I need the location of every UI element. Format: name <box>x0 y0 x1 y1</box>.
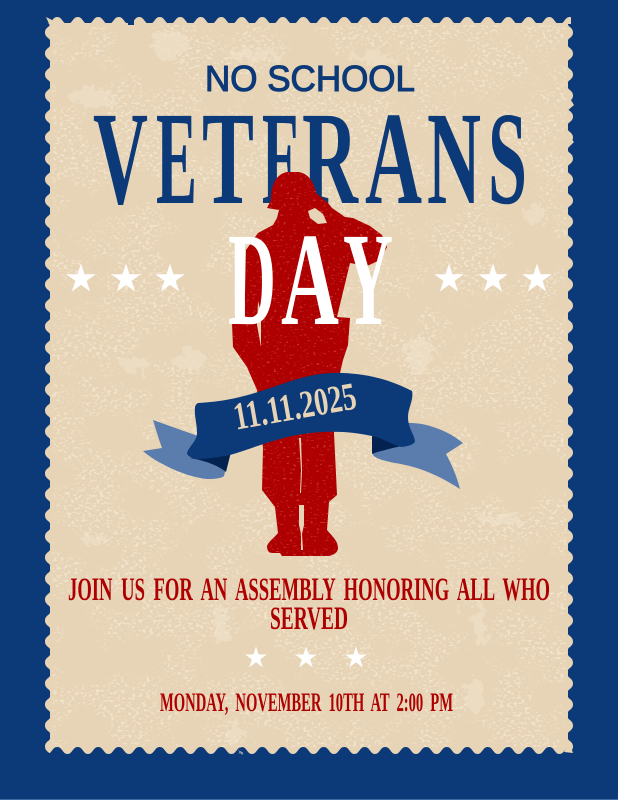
heading: veterans <box>93 84 527 232</box>
heading: day: A <box>281 205 339 353</box>
bottom edge line <box>0 799 618 800</box>
heading: veterans: T <box>202 84 254 232</box>
gap between saluting arm and face <box>308 208 327 224</box>
ribbon left tail <box>143 420 230 479</box>
heading: no school: NO SCHOOL <box>205 58 415 99</box>
paper texture flecks <box>52 25 566 747</box>
heading: day <box>228 205 393 353</box>
stars: right row <box>434 264 552 292</box>
stars: left row <box>66 264 185 292</box>
ribbon date: 11.11.2025 <box>230 375 360 439</box>
gap between arm and torso <box>257 301 261 347</box>
illustration: saluting soldier silhouette <box>228 170 390 560</box>
heading: day: Y <box>343 205 393 353</box>
gap between boots <box>299 505 304 550</box>
heading: veterans: R <box>302 84 359 232</box>
ribbon banner <box>143 373 463 489</box>
text: assembly line 2: SERVED <box>270 601 348 637</box>
ribbon main band <box>187 373 415 459</box>
heading: day: D <box>228 205 276 353</box>
stars: centre row <box>245 646 367 667</box>
heading: veterans: S <box>488 84 527 232</box>
heading: veterans: V <box>93 84 148 232</box>
heading: veterans: N <box>427 84 481 232</box>
heading: veterans: E <box>262 84 301 232</box>
paper texture blotches <box>68 29 547 749</box>
ribbon right tail <box>372 423 463 489</box>
ribbon left fold <box>190 452 231 472</box>
heading: veterans: E <box>156 84 197 232</box>
gap between legs <box>299 438 302 493</box>
ribbon right fold <box>372 434 415 454</box>
heading: veterans: A <box>365 84 422 232</box>
